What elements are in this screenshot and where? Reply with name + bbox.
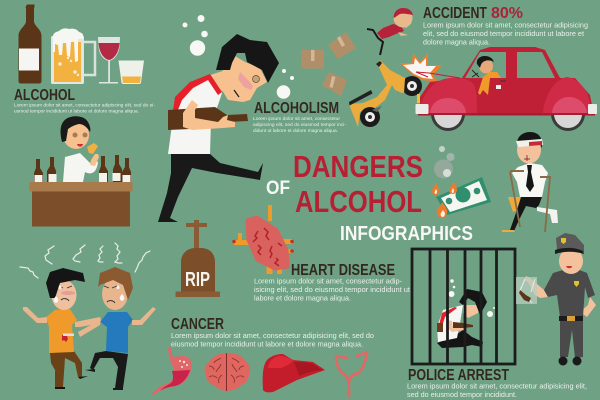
text: alcoholism description: Lorem ipsum dolor sit amet, consectetur xyxy=(253,116,340,122)
icon: crash burst xyxy=(400,53,442,96)
label: RIP: RIP xyxy=(185,269,210,291)
icon: RIP tombstone xyxy=(176,220,220,297)
text: alcoholism description: didunt ut labore et dolore magna aliqua. xyxy=(253,128,338,134)
icon: flying boxes xyxy=(301,32,356,96)
driver xyxy=(472,56,506,95)
heading: accident 80%: 80% xyxy=(491,5,523,22)
legs xyxy=(158,154,263,222)
illustration: drunk man with bottle xyxy=(158,34,279,222)
heading: alcoholism: ALCOHOLISM xyxy=(254,100,339,117)
text: alcohol description: Lorem ipsum dolor sit amet, consectetur adipiscing elit, sed do ei- xyxy=(14,102,155,108)
text: cancer description: Lorem ipsum dolor sit amet, consectetur adipisicing elit, sed do xyxy=(171,333,374,340)
text: accident description: Lorem ipsum dolor sit amet, consectetur adipisicing xyxy=(423,22,588,30)
neck xyxy=(210,70,226,93)
text: accident description: elit, sed do eiusmod tempor incididunt ut labore et xyxy=(423,31,584,38)
illustration: falling rider xyxy=(367,8,413,55)
text: heart disease description: isicing elit, sed do eiusmod tempor incididunt ut xyxy=(254,287,410,294)
hair xyxy=(216,34,279,83)
icon: brain xyxy=(205,353,250,391)
illustration: jailed man xyxy=(437,289,487,348)
title: infographics: INFOGRAPHICS xyxy=(340,223,473,245)
text: police arrest description: Lorem ipsum dolor sit amet, consectetur adipisicing elit, xyxy=(407,384,587,390)
illustration: injured man on crutches xyxy=(502,132,558,232)
heading: police arrest: POLICE ARREST xyxy=(408,367,509,384)
bar bottles xyxy=(34,155,131,189)
icon: bubbles grey xyxy=(434,146,454,178)
text: accident description: dolore magna aliqua. xyxy=(423,40,490,46)
arm xyxy=(183,100,235,130)
illustration: two men fighting xyxy=(20,243,156,390)
text: heart disease description: labore et dolore magna aliqua. xyxy=(254,296,351,302)
strap xyxy=(172,74,222,117)
left man xyxy=(23,268,102,389)
bar counter xyxy=(30,182,132,226)
title: dangers: DANGERS xyxy=(293,149,423,184)
bubbles xyxy=(182,15,294,99)
icon: wine glass xyxy=(98,37,120,84)
icon: beer mug xyxy=(51,28,95,84)
heading: accident 80%: ACCIDENT xyxy=(423,5,487,22)
heading: cancer: CANCER xyxy=(171,316,224,333)
heading: alcohol: ALCOHOL xyxy=(14,87,75,104)
illustration: man drinking at bar xyxy=(30,116,132,226)
head xyxy=(222,53,267,102)
illustration: jail bars xyxy=(412,249,515,364)
icon: heart xyxy=(232,205,294,274)
icon: alcohol bottle xyxy=(18,4,42,84)
illustration: red car xyxy=(416,47,597,131)
icon: stomach xyxy=(152,347,191,395)
illustration: yellow scooter xyxy=(349,60,408,127)
text: alcoholism description: adipiscing elit, sed do eiusmod tempor inci- xyxy=(253,122,346,128)
bottle and bag xyxy=(168,107,248,130)
text: heart disease description: Lorem ipsum dolor sit amet, consectetur adip- xyxy=(254,278,403,286)
heading: heart disease: HEART DISEASE xyxy=(291,262,395,279)
title: alcohol: ALCOHOL xyxy=(295,184,422,219)
angry squiggles xyxy=(20,243,150,278)
illustration: police officer xyxy=(516,233,596,366)
text: alcohol description: usmod tempor incididunt ut labore et dolore magna aliqua. xyxy=(14,108,139,114)
shirt xyxy=(168,75,222,154)
right man xyxy=(78,267,156,390)
icon: whisky tumbler xyxy=(118,60,144,84)
icon: intestine xyxy=(336,352,367,396)
text: cancer description: eiusmod tempor incididunt ut labore et dolore magna aliqua. xyxy=(171,342,363,348)
icon: liver xyxy=(263,354,325,392)
text: police arrest description: sed do eiusmod tempor incididunt. xyxy=(407,392,517,399)
title: of: OF xyxy=(266,178,290,199)
bubbles: jail xyxy=(448,279,495,317)
icon: burning money xyxy=(432,177,491,218)
